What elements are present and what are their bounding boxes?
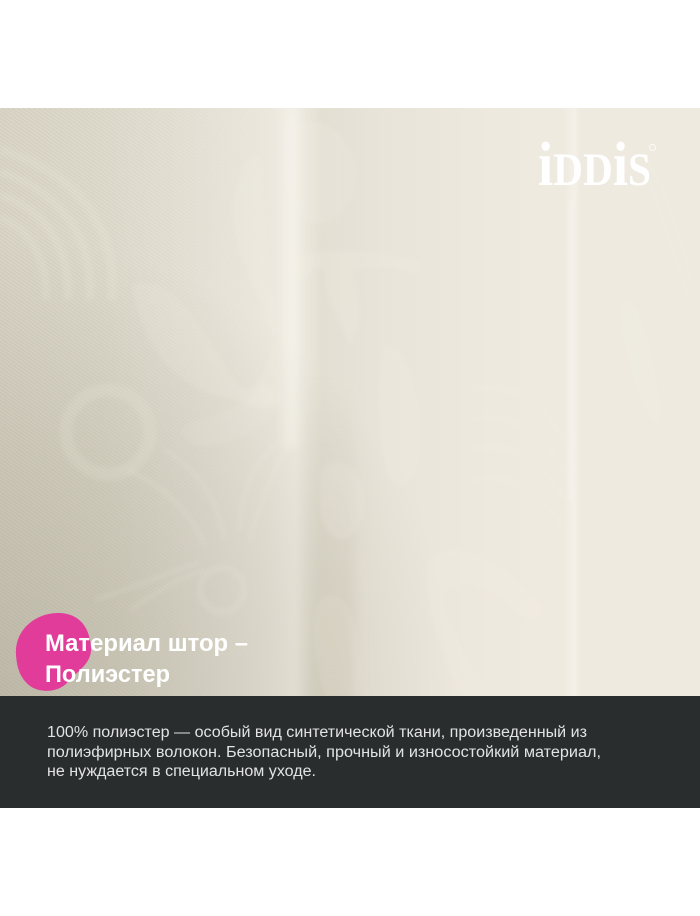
heading: Полиэстер xyxy=(45,661,170,688)
infographic canvas xyxy=(0,108,700,808)
dark description panel xyxy=(0,696,700,808)
description text: 100% полиэстер — особый вид синтетической ткани, произведенный из xyxy=(47,724,587,741)
heading: Материал штор – xyxy=(45,630,248,657)
description text xyxy=(47,724,601,780)
photo: cream jacquard curtain xyxy=(0,108,700,710)
description text: полиэфирных волокон. Безопасный, прочный и износостойкий материал, xyxy=(47,744,601,761)
logo: IDDIS: iDDiS xyxy=(538,131,651,199)
description text: не нуждается в специальном уходе. xyxy=(47,763,316,780)
heading xyxy=(45,630,248,688)
pink accent blob xyxy=(16,613,91,691)
